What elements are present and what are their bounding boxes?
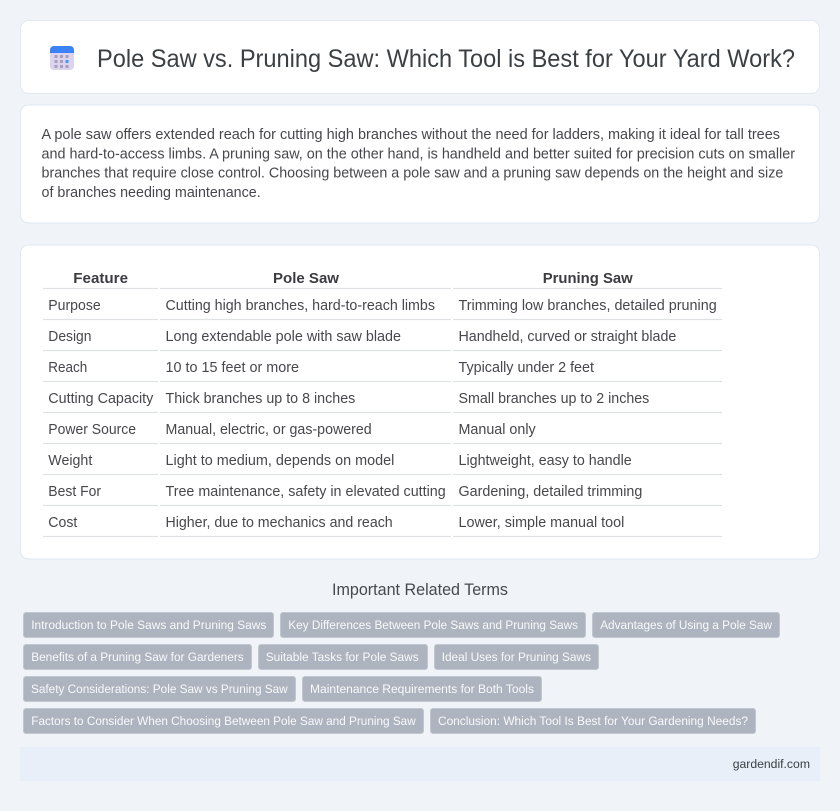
table row: design: Long extendable pole with saw blade — [166, 329, 401, 345]
table header row: Feature — [73, 270, 128, 287]
text block: summary: A pole saw offers extended reach for cutting high branches without the need for ladders, making it ideal for tall trees — [42, 127, 780, 143]
table row: purpose — [43, 298, 722, 320]
heading: important related terms: Important Related Terms — [332, 581, 508, 599]
panel: summary paragraph — [20, 105, 820, 223]
table row: weight: Weight — [48, 453, 92, 469]
tag: safety — [24, 676, 296, 702]
table row: design — [43, 329, 722, 350]
table row: best for — [43, 484, 722, 506]
table row: reach: Reach — [48, 360, 87, 376]
tag: maintenance — [302, 676, 542, 702]
tag: suitable tasks: Suitable Tasks for Pole Saws — [266, 650, 419, 664]
table row: weight: Lightweight, easy to handle — [458, 453, 632, 469]
tag: ideal uses — [434, 644, 598, 670]
tag: suitable tasks — [258, 644, 428, 670]
text block: summary: and hard-to-access limbs. A pruning saw, on the other hand, is handheld and better suited for precision cuts on smaller — [42, 146, 795, 162]
tag: advantages — [592, 612, 780, 638]
table row: purpose: Trimming low branches, detailed pruning — [458, 298, 717, 314]
footer site name: gardendif.com — [733, 757, 810, 771]
table row: power source: Manual, electric, or gas-powered — [166, 422, 372, 438]
table row: power source: Manual only — [458, 422, 537, 438]
panel: comparison table — [20, 245, 820, 559]
tag: factors — [24, 708, 424, 734]
tag: benefits — [24, 644, 252, 670]
table row: power source: Power Source — [48, 422, 136, 438]
table row: cost: Lower, simple manual tool — [458, 515, 624, 531]
table header row — [43, 270, 722, 288]
text block: summary — [42, 127, 795, 201]
tag: key differences — [280, 612, 586, 638]
related terms tags — [24, 612, 780, 734]
table row: design: Design — [48, 329, 92, 345]
tag: introduction — [24, 612, 274, 638]
title: Pole Saw vs. Pruning Saw: Which Tool is Best for Your Yard Work? — [97, 46, 795, 73]
table row: purpose: Cutting high branches, hard-to-reach limbs — [166, 298, 435, 314]
panel: header — [20, 20, 820, 94]
table row: design: Handheld, curved or straight blade — [458, 329, 676, 345]
table row: power source — [43, 422, 722, 444]
table header row: Pruning Saw — [543, 270, 633, 287]
table row: reach: Typically under 2 feet — [458, 360, 594, 376]
table row: weight: Light to medium, depends on model — [166, 453, 394, 469]
tag: conclusion — [430, 708, 756, 734]
table row: purpose: Purpose — [48, 298, 101, 314]
table row: cutting capacity: Small branches up to 2 inches — [458, 391, 649, 407]
tag: ideal uses: Ideal Uses for Pruning Saws — [442, 650, 591, 664]
table row: cutting capacity: Thick branches up to 8 inches — [166, 391, 355, 407]
text block: summary: branches that require close control. Choosing between a pole saw and a pruning saw depends on the height and size — [42, 166, 783, 182]
table row: cost — [43, 515, 722, 536]
table row: reach: 10 to 15 feet or more — [166, 360, 299, 376]
icon: calendar — [50, 46, 74, 70]
table row: best for: Best For — [48, 484, 101, 500]
table row: cost: Higher, due to mechanics and reach — [166, 515, 393, 531]
tag: key differences: Key Differences Between Pole Saws and Pruning Saws — [288, 618, 578, 632]
tag: maintenance: Maintenance Requirements for Both Tools — [310, 682, 534, 696]
tag: factors: Factors to Consider When Choosing Between Pole Saw and Pruning Saw — [31, 714, 416, 728]
tag: introduction: Introduction to Pole Saws and Pruning Saws — [31, 618, 266, 632]
tag: benefits: Benefits of a Pruning Saw for Gardeners — [31, 650, 244, 664]
table row: best for: Tree maintenance, safety in elevated cutting — [166, 484, 446, 500]
tag: advantages: Advantages of Using a Pole Saw — [600, 618, 772, 632]
table row: cutting capacity: Cutting Capacity — [48, 391, 154, 407]
table row: cutting capacity — [43, 391, 722, 412]
table row: cost: Cost — [48, 515, 77, 531]
table row: reach — [43, 360, 722, 382]
text block: summary: of branches needing maintenance. — [42, 185, 261, 201]
table header row: Pole Saw — [273, 270, 339, 287]
table row: weight — [43, 453, 722, 474]
footer — [20, 747, 820, 781]
tag: conclusion: Conclusion: Which Tool Is Best for Your Gardening Needs? — [438, 714, 748, 728]
table row: best for: Gardening, detailed trimming — [458, 484, 642, 500]
tag: safety: Safety Considerations: Pole Saw vs Pruning Saw — [31, 682, 288, 696]
